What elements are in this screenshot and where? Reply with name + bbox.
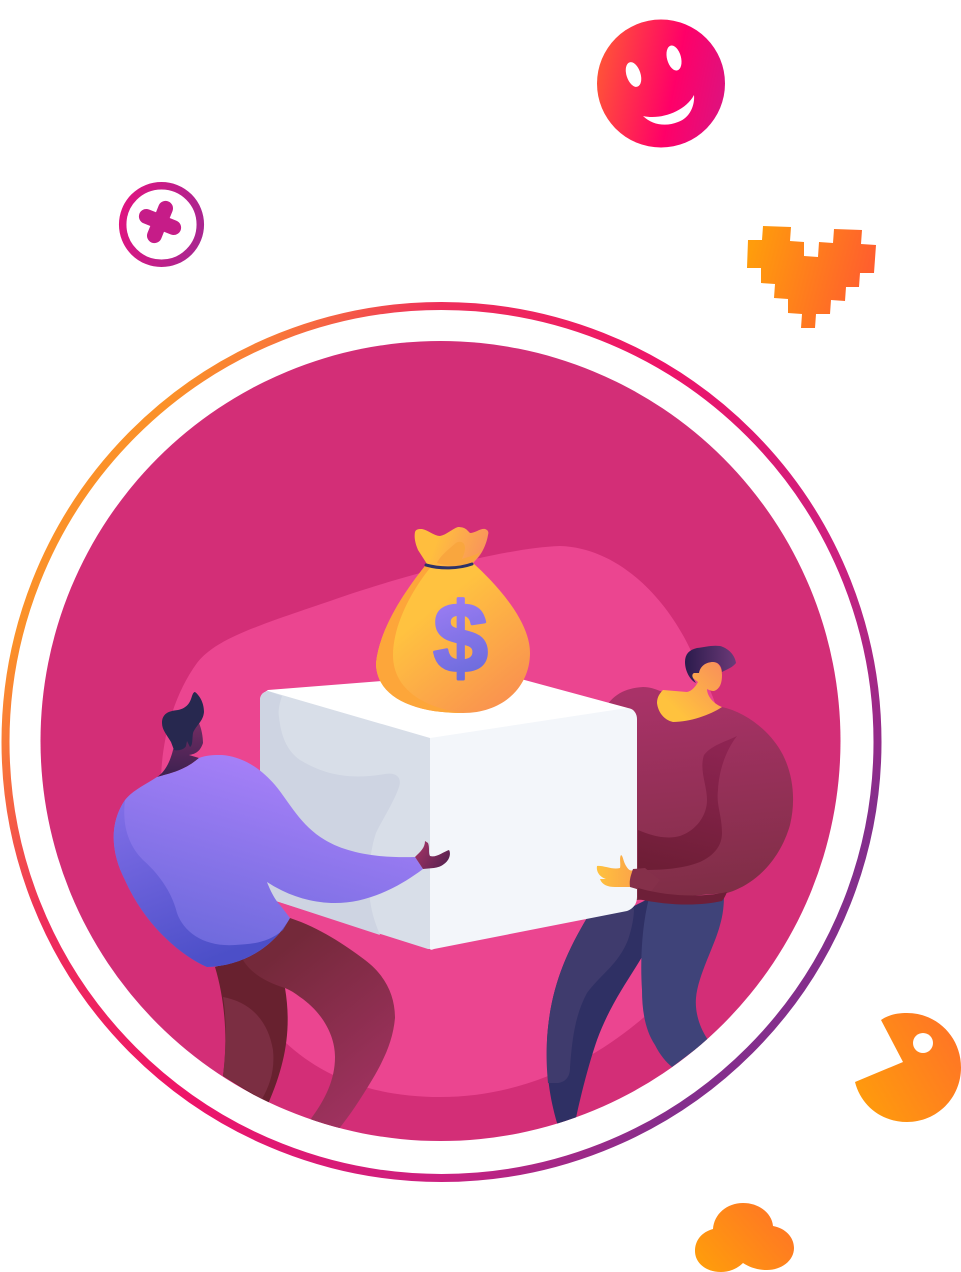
neck xyxy=(157,723,203,777)
left person xyxy=(114,692,450,967)
bag tie xyxy=(426,564,472,568)
inner magenta disc xyxy=(40,341,840,1141)
back leg highlight xyxy=(223,997,273,1099)
back leg shadow xyxy=(215,958,288,1104)
dollar sign: $ xyxy=(433,582,488,692)
money bag xyxy=(376,527,530,713)
box left face xyxy=(260,691,431,949)
icon: cloud xyxy=(695,1203,794,1272)
left person front leg xyxy=(243,918,395,1130)
pac-man eye xyxy=(913,1033,933,1053)
icon: pac-man xyxy=(855,1013,961,1122)
background blob xyxy=(161,546,734,1097)
bag body xyxy=(376,563,530,713)
back leg shadow xyxy=(547,898,650,1126)
sweater hem xyxy=(638,888,727,905)
hair xyxy=(162,692,204,750)
white box xyxy=(260,672,637,950)
sleeve shading xyxy=(638,736,737,870)
scene inside disc xyxy=(114,527,793,1130)
skin: neck, collar and face xyxy=(657,662,722,722)
smiley mouth xyxy=(643,95,694,125)
sleeve cuff xyxy=(630,868,648,890)
hand xyxy=(415,841,450,869)
icon: smiley face xyxy=(597,20,725,148)
bag left shading xyxy=(376,566,463,713)
bag knot xyxy=(415,527,488,567)
knot fold xyxy=(437,542,480,566)
right person back leg xyxy=(547,898,650,1126)
hand xyxy=(597,855,633,887)
right person torso xyxy=(600,646,793,900)
box left face shadow xyxy=(260,691,400,935)
hair xyxy=(685,646,736,683)
back leg highlight xyxy=(547,908,634,1083)
outer gradient ring xyxy=(6,306,878,1178)
smiley eyes xyxy=(623,44,684,89)
torso and arm xyxy=(114,755,423,967)
right person arm and hand over box xyxy=(597,736,737,905)
icon: cross in circle xyxy=(123,186,200,263)
right person front leg xyxy=(641,895,724,1067)
icon: pixel heart xyxy=(747,226,876,328)
box top face xyxy=(262,680,628,738)
torso shadow xyxy=(114,800,290,967)
box right face xyxy=(430,708,637,950)
sweater body xyxy=(600,687,793,900)
cross mark xyxy=(139,201,181,243)
left person back leg xyxy=(215,958,288,1104)
